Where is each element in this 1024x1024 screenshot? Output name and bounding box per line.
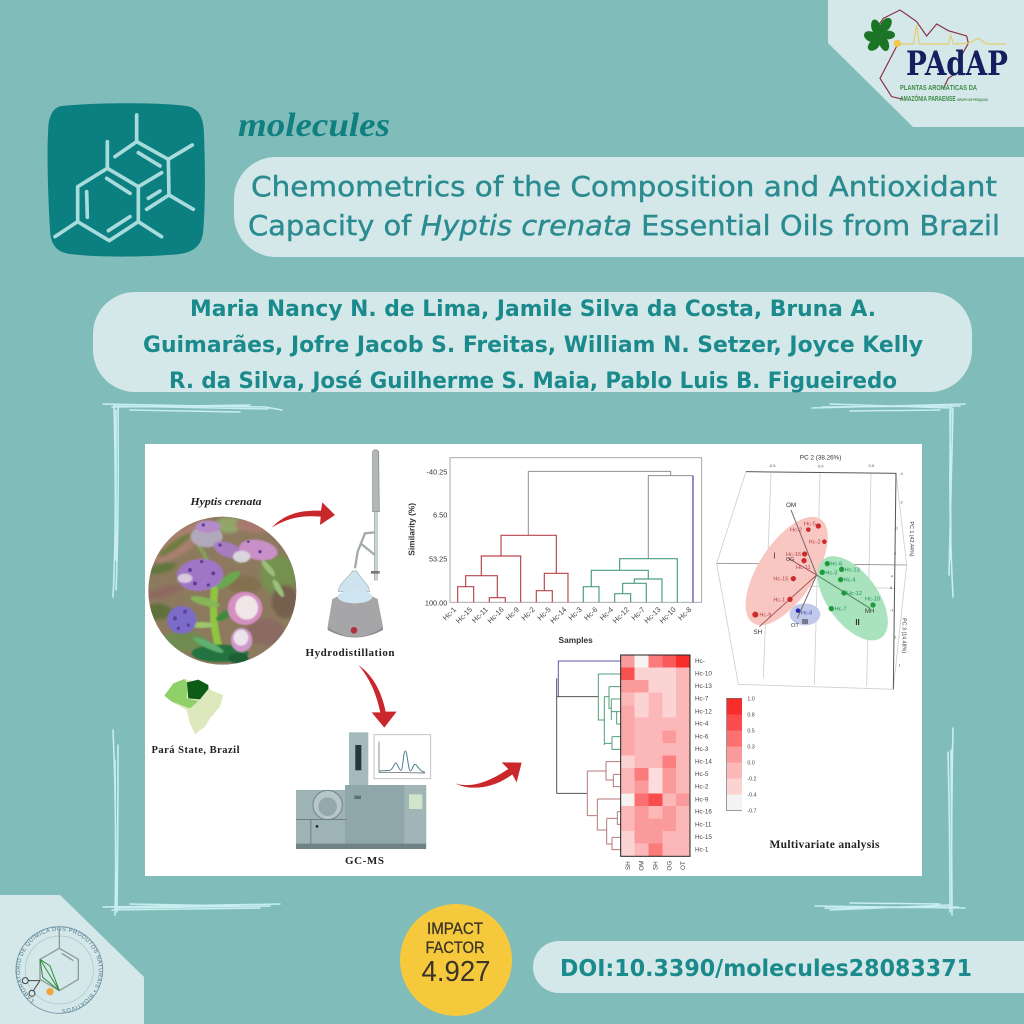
panel: authors (93, 292, 972, 394)
biplot: green labels: Hc-12 (847, 591, 862, 597)
x axis title: Samples (559, 635, 593, 645)
icon: hydrodistillation apparatus (328, 450, 383, 637)
y axis labels (425, 467, 447, 607)
label: GC-MS: GC-MS (345, 855, 384, 867)
biplot: tick labels: 0 (894, 634, 897, 639)
biplot: green labels: Hc-3 (825, 570, 837, 576)
heatmap: row labels: Hc-10 (695, 671, 712, 678)
arrow: plant to hydrodistillation (272, 502, 335, 528)
biplot: tick labels: 0.5 (869, 463, 875, 468)
title line 1: Chemometrics of the Composition and Antioxidant (251, 170, 997, 203)
heatmap: row labels: Hc-15 (695, 834, 712, 841)
sample labels: Hc-9 (504, 605, 521, 622)
biplot: red labels: Hc-2 (790, 528, 802, 534)
title line 2: Capacity of Hyptis crenata Essential Oils from Brazil (248, 209, 1000, 242)
logo: map outline (874, 10, 968, 99)
biplot: green labels: Hc-7 (835, 607, 847, 613)
heatmap: column labels: OM (639, 861, 646, 871)
journal name: molecules (238, 107, 390, 144)
y axis labels: 53.25 (429, 555, 447, 564)
biplot: tick labels: 2 (894, 551, 897, 556)
logo: leaves (862, 16, 901, 53)
y axis title: Similarity (%) (407, 503, 417, 556)
photo: Hyptis crenata flowers (144, 514, 298, 668)
biplot: green labels (825, 562, 880, 613)
biplot: tick labels: 1 (899, 663, 902, 668)
biplot: green labels: Hc-10 (865, 596, 880, 602)
heatmap: column labels: SH (653, 861, 660, 870)
heatmap: row labels: Hc-6 (695, 733, 709, 740)
sample labels: Hc-15 (454, 605, 474, 625)
heatmap: row labels (695, 658, 712, 853)
sample labels: Hc-1 (441, 605, 458, 622)
biplot: red labels: Hc-11 (796, 565, 811, 571)
sample labels: Hc-2 (519, 605, 537, 622)
heatmap: row labels: Hc-9 (695, 796, 709, 803)
sample labels: Hc-13 (642, 605, 662, 625)
biplot: vector and cluster labels: I (773, 551, 776, 560)
heatmap: row labels: Hc-5 (695, 771, 709, 778)
heatmap: colour scale (727, 696, 757, 815)
panel: title (234, 157, 1024, 257)
biplot: vector and cluster labels: SH (753, 629, 763, 636)
biplot: red points (752, 523, 827, 618)
biplot: vector and cluster labels: MH (865, 609, 874, 615)
biplot: vector and cluster labels: II (855, 618, 860, 627)
heatmap: column labels: SH (625, 861, 632, 870)
biplot: 3D box (717, 472, 907, 689)
heatmap: row labels: Hc-12 (695, 708, 712, 715)
heatmap: row labels: Hc-4 (695, 721, 709, 728)
heatmap: colour scale: 0.8 (747, 712, 755, 718)
biplot: PC1 axis title: PC 1 (42.44%) (908, 522, 914, 557)
biplot: tick labels (769, 463, 904, 668)
logo: spectrum line (897, 25, 1006, 44)
sample labels (441, 605, 693, 625)
logo: tagline second line: AMAZÔNIA PARAENSE GRUPO DE PESQUISA (900, 94, 988, 103)
heatmap: row labels: Hc-3 (695, 746, 709, 753)
badge: IMPACT: IMPACT (427, 920, 483, 938)
biplot: green points (820, 561, 876, 611)
badge: FACTOR: FACTOR (426, 939, 485, 957)
biplot: PC3 axis title: PC 3 (14.48%) (901, 618, 907, 653)
dendrogram: blue branch (691, 476, 695, 602)
heatmap: row labels: Hc- (695, 658, 705, 665)
y axis labels: 100.00 (425, 598, 447, 607)
heatmap: colour scale: -0.2 (747, 777, 757, 783)
sample labels: Hc-8 (676, 605, 693, 622)
logo: scissors (22, 978, 40, 996)
label: Para State: Pará State, Brazil (152, 745, 240, 756)
heatmap: row labels: Hc-14 (695, 759, 712, 766)
label: multivariate analysis: Multivariate analysis (770, 839, 880, 851)
biplot: tick labels: -1 (890, 608, 894, 613)
heatmap: colour scale: -0.7 (747, 809, 757, 815)
species label: Hyptis crenata (189, 496, 262, 508)
icon: molecule badge (48, 103, 205, 257)
authors line 2: Guimarães, Jofre Jacob S. Freitas, William N. Setzer, Joyce Kelly (143, 333, 923, 358)
heatmap: column labels: OT (680, 861, 687, 870)
biplot: red labels: Hc-5 (804, 522, 816, 528)
dendrogram: red cluster (458, 535, 568, 602)
sample labels: Hc-10 (658, 605, 678, 625)
sample labels: Hc-6 (582, 605, 599, 622)
panel: laboratory logo (0, 895, 144, 1024)
sample labels: Hc-16 (486, 605, 506, 625)
logo: ring text: LABORATÓRIO DE QUÍMICA DOS PRODUTOS NATURAIS • BIOATIVOS • (15, 926, 103, 1013)
biplot: red labels: Hc-2 (809, 539, 821, 545)
arrow: GC-MS to multivariate analysis (455, 762, 522, 788)
biplot: tick labels: -0.5 (769, 463, 776, 468)
dendrogram: grey links (528, 471, 693, 559)
arrow: hydrodistillation to GC-MS (358, 665, 397, 728)
y axis labels: -40.25 (427, 467, 447, 476)
biplot: vector and cluster labels: OM (786, 502, 796, 509)
panel: DOI (533, 941, 1024, 993)
heatmap: colour scale: 0.0 (747, 761, 755, 767)
heatmap: colour scale: 1.0 (747, 696, 755, 702)
biplot: red labels: Hc-16 (786, 552, 801, 558)
map: Brazil with Para highlighted (164, 679, 223, 734)
heatmap: colour scale: -0.4 (747, 793, 757, 799)
heatmap: cells (621, 655, 690, 856)
biplot: tick labels: -2 (899, 500, 904, 505)
biplot: green labels: Hc-13 (845, 567, 860, 573)
authors line 3: R. da Silva, José Guilherme S. Maia, Pablo Luis B. Figueiredo (169, 369, 897, 394)
DOI text: DOI:10.3390/molecules28083371 (560, 956, 972, 982)
sample labels: Hc-11 (470, 605, 490, 625)
chart: PCA biplot (717, 454, 914, 689)
heatmap: row labels: Hc-13 (695, 683, 712, 690)
biplot: red labels: Hc-1 (773, 597, 785, 603)
logo: leaf lines (40, 959, 59, 991)
biplot: blue point (796, 608, 800, 613)
biplot: green labels: Hc-6 (830, 562, 842, 568)
biplot: red labels: Hc-9 (759, 613, 771, 619)
icon: GC-MS instrument (296, 732, 426, 849)
heatmap: column labels (625, 861, 687, 871)
authors line 1: Maria Nancy N. de Lima, Jamile Silva da Costa, Bruna A. (190, 297, 876, 322)
biplot: cluster II ellipse (804, 544, 902, 653)
sample labels: Hc-14 (548, 605, 568, 625)
sample labels: Hc-5 (535, 605, 553, 622)
biplot: red labels: Hc-15 (773, 577, 788, 583)
panel: graphical abstract (144, 444, 922, 876)
label: hydrodistillation: Hydrodistillation (306, 647, 394, 659)
y axis labels: 6.50 (433, 511, 447, 520)
heatmap: row dendrogram (557, 661, 621, 850)
biplot: tick labels: 4 (891, 574, 894, 579)
biplot: vector and cluster labels (753, 502, 874, 636)
biplot: cluster III ellipse (790, 603, 820, 625)
heatmap: colour scale: 0.5 (747, 728, 755, 734)
biplot: PC2 axis title: PC 2 (38.26%) (800, 454, 841, 461)
heatmap: row labels: Hc-2 (695, 784, 709, 791)
biplot: vector and cluster labels: OG (786, 557, 794, 563)
heatmap: row labels: Hc-11 (695, 821, 712, 828)
heatmap: row labels: Hc-16 (695, 809, 712, 816)
biplot: blue label: Hc-8 (801, 611, 812, 617)
biplot: red labels (759, 522, 821, 619)
badge: value: 4.927 (422, 956, 490, 988)
panel: PAdAP logo (828, 0, 1024, 127)
badge: impact factor (400, 904, 512, 1016)
biplot: tick labels: 6 (890, 585, 893, 590)
heatmap: row labels: Hc-7 (695, 696, 709, 703)
biplot: cluster I ellipse (729, 504, 844, 638)
biplot: tick labels: 0.0 (818, 464, 824, 469)
biplot: green labels: Hc-4 (844, 578, 856, 584)
chart: heatmap (557, 655, 757, 871)
biplot: vector and cluster labels: OT (791, 623, 799, 629)
sketch frame (103, 404, 965, 915)
biplot: vector and cluster labels: III (802, 617, 808, 626)
heatmap: row labels: Hc-1 (695, 846, 709, 853)
biplot: loading vectors (759, 510, 870, 627)
sample labels: Hc-3 (566, 605, 584, 622)
logo: molecule (40, 928, 78, 991)
logo: tagline: PLANTAS AROMÁTICAS DA (900, 83, 977, 92)
biplot: tick labels: -4 (899, 471, 904, 476)
heatmap: colour scale: 0.3 (747, 745, 755, 751)
sample labels: Hc-4 (598, 605, 615, 622)
sample labels: Hc-12 (611, 605, 631, 625)
biplot: tick labels: 0 (895, 526, 898, 531)
heatmap: column labels: OG (666, 861, 673, 871)
chart: chromatogram inset (374, 735, 431, 779)
dendrogram: green cluster (583, 559, 677, 602)
logo: orange dot (46, 988, 54, 995)
sample labels: Hc-7 (629, 605, 647, 622)
chart: similarity dendrogram (407, 458, 702, 645)
